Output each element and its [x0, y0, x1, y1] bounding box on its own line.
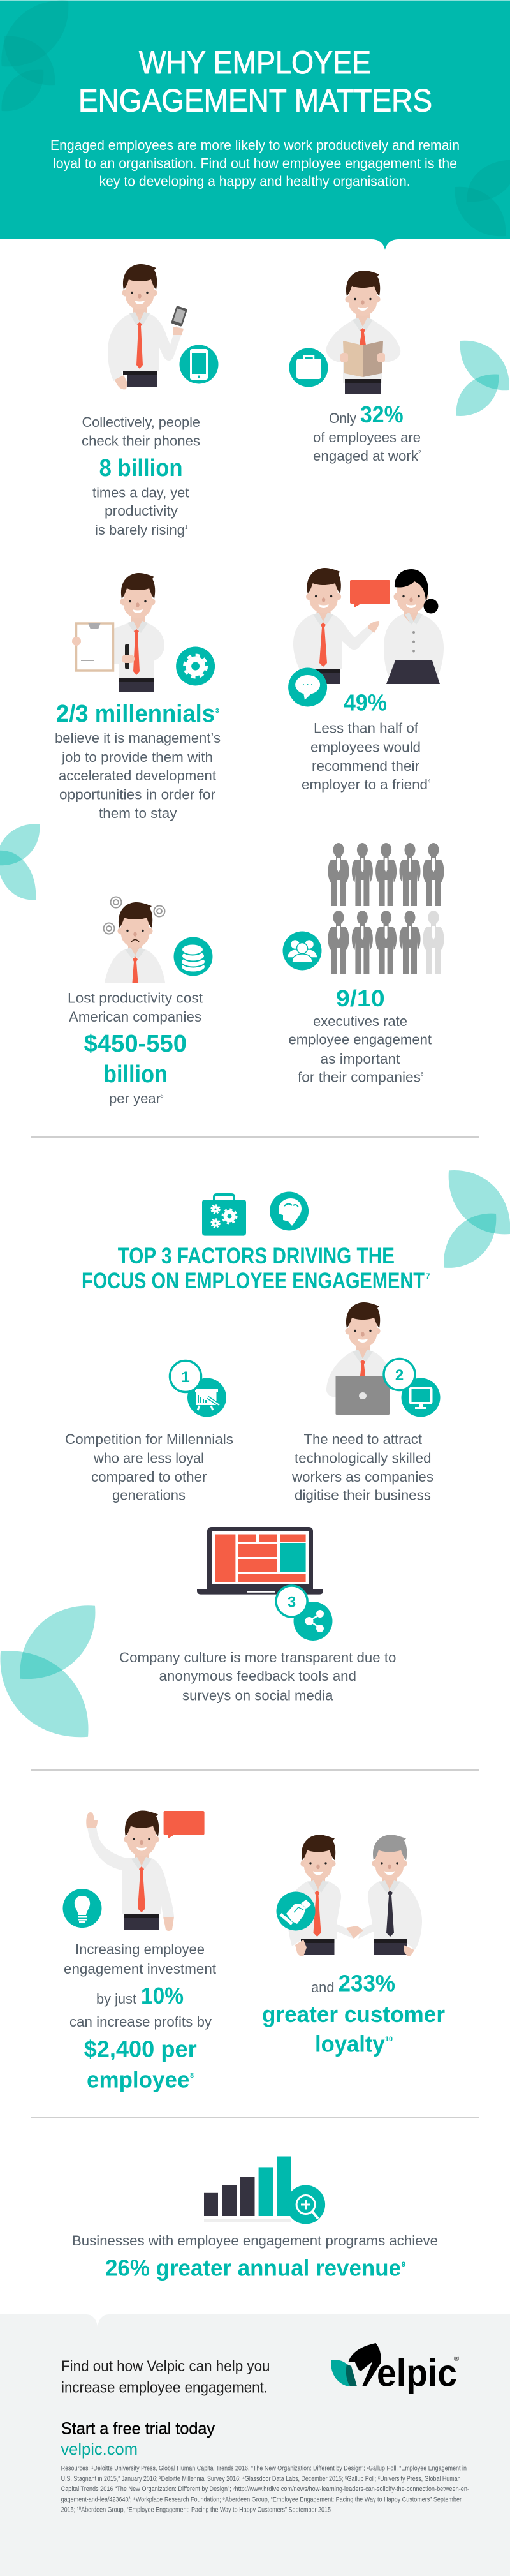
text: annual revenue: 26% greater annual revenue: [105, 2255, 401, 2281]
text: 49%: [302, 689, 431, 793]
text: 9/10: as important: [320, 1051, 400, 1067]
text: lost productivity: $450-550: [84, 1031, 187, 1057]
text: annual revenue: 9: [402, 2261, 405, 2268]
text: phones: 1: [185, 525, 188, 530]
decorative leaf right 2: [444, 1170, 510, 1268]
text: investment: can increase profits by: [69, 2014, 212, 2030]
call to action: increase employee engagement.: [61, 2379, 268, 2397]
heading: FOCUS ON EMPLOYEE ENGAGEMENT: [82, 1269, 425, 1293]
text: investment: employee: [87, 2066, 189, 2092]
text: lost productivity: American companies: [69, 1009, 201, 1025]
text: phones: Collectively, people: [82, 414, 200, 430]
text: millennials: [55, 701, 221, 821]
footer panel: [0, 2314, 510, 2576]
number 3: [276, 1586, 307, 1617]
text: 32%: engaged at work: [313, 448, 419, 464]
text: investment: 8: [190, 2072, 194, 2080]
text: millennials: accelerated development: [59, 768, 217, 784]
text: lost productivity: billion: [103, 1061, 168, 1088]
icon: group: [283, 932, 321, 970]
text: lost productivity: 5: [161, 1093, 164, 1099]
logo: Velpic: V: [347, 2354, 379, 2394]
text: factor 2: digitise their business: [295, 1487, 431, 1503]
text: phones: 8 billion: [99, 455, 183, 482]
text: annual revenue: Businesses with employee engagement programs achieve: [72, 2233, 438, 2249]
stat: customer loyalty: [262, 1835, 445, 2057]
illustration: man with phone: [108, 264, 187, 389]
stat: 32% engaged: [289, 271, 421, 464]
stat: phones: [82, 264, 218, 538]
text: factor 1: compared to other: [91, 1469, 207, 1485]
illustration: man talking to woman: [293, 568, 444, 684]
text: 32%: 2: [418, 450, 421, 456]
logo: Velpic: elpic: [377, 2351, 457, 2394]
text: factor 2: The need to attract: [303, 1431, 423, 1447]
logo: Velpic: ®: [454, 2355, 459, 2363]
icon: monitor: [402, 1378, 440, 1417]
call to action: velpic.com: [61, 2439, 138, 2459]
factor 2: [291, 1302, 440, 1503]
text: 32%: 32%: [360, 401, 404, 428]
text: loyalty: loyalty: [315, 2031, 385, 2057]
decorative leaf left: [0, 824, 40, 900]
text: factor 1: who are less loyal: [93, 1450, 204, 1466]
text: investment: 10%: [141, 1983, 184, 2009]
text: millennials: believe it is management’s: [55, 730, 221, 746]
text: loyalty: and: [311, 1979, 334, 1995]
text: loyalty: 10: [385, 2036, 393, 2043]
icon: presentation board: [187, 1378, 226, 1417]
text: 32%: of employees are: [313, 429, 421, 445]
stat: investment: [62, 1811, 217, 2092]
decorative leaf right 1: [456, 341, 509, 416]
text: 49%: Less than half of: [314, 720, 419, 736]
illustration: man with clipboard: [72, 573, 164, 692]
intro text: loyal to an organisation. Find out how employee engagement is the: [53, 156, 457, 171]
text: factor 2: workers as companies: [291, 1469, 433, 1485]
text: lost productivity: [68, 990, 203, 1106]
illustration: handshake: [288, 1835, 422, 1956]
text: annual revenue: [72, 2233, 438, 2281]
text: investment: by just: [96, 1991, 137, 2007]
illustration: stressed man: [103, 897, 165, 983]
text: 49%: 49%: [344, 689, 387, 716]
text: factor 1: [65, 1431, 233, 1503]
text: 9/10: executives rate: [313, 1013, 407, 1029]
intro text: [50, 137, 460, 189]
text: millennials: them to stay: [99, 805, 177, 821]
call to action: Find out how Velpic can help you: [61, 2358, 270, 2375]
header leaves right: [455, 160, 510, 236]
text: millennials: 2/3 millennials: [56, 701, 215, 727]
text: investment: $2,400 per: [84, 2036, 197, 2062]
text: factor 3: surveys on social media: [182, 1687, 333, 1704]
section: top 3 factors: [65, 1192, 440, 1704]
text: 32%: [313, 401, 421, 464]
illustration: man at laptop: [326, 1302, 390, 1415]
text: phones: [82, 414, 200, 538]
text: 49%: employees would: [310, 739, 421, 755]
icon: head with brain: [270, 1192, 309, 1230]
icon: handshake: [277, 1891, 315, 1931]
factor 1: [65, 1360, 233, 1503]
text: millennials: 3: [215, 708, 219, 715]
text: phones: check their phones: [82, 433, 200, 449]
bar chart icon: [204, 2157, 325, 2224]
text: factor 3: [119, 1649, 396, 1704]
text: millennials: job to provide them with: [61, 749, 213, 765]
illustration: man reading: [326, 271, 400, 394]
text: investment: Increasing employee: [75, 1941, 205, 1958]
stat: lost productivity: [68, 897, 213, 1106]
text: phones: times a day, yet: [92, 485, 189, 500]
icon: coins: [173, 937, 213, 976]
text: 49%: employer to a friend: [302, 777, 428, 793]
icon: briefcase with gears: [202, 1195, 246, 1236]
icon: gear: [176, 647, 215, 685]
icon: smartphone: [180, 345, 218, 384]
text: 9/10: 9/10: [336, 985, 385, 1011]
text: factor 3: Company culture is more transparent due to: [119, 1649, 396, 1665]
text: loyalty: 233%: [339, 1970, 395, 1996]
text: investment: engagement investment: [64, 1961, 217, 1977]
text: factor 2: [291, 1431, 433, 1503]
text: 9/10: employee engagement: [288, 1031, 432, 1048]
text: factor 2: technologically skilled: [295, 1450, 431, 1466]
stat: 9/10 executives: [283, 843, 444, 1085]
text: 32%: Only: [329, 410, 357, 426]
heading: TOP 3 FACTORS DRIVING THE: [118, 1244, 395, 1269]
header banner: [0, 0, 510, 250]
text: phones: is barely rising: [95, 522, 185, 538]
number 1: 1: [181, 1369, 190, 1386]
resources: 2015; ¹⁰Aberdeen Group, “Employee Engagement: Pacing the Way to Happy Customers” September 2015: [61, 2506, 331, 2514]
text: 9/10: for their companies: [298, 1069, 421, 1085]
illustration: laptop dashboard: [197, 1527, 323, 1595]
text: lost productivity: Lost productivity cost: [68, 990, 203, 1006]
factor 3: [119, 1527, 396, 1704]
call to action: [61, 2358, 270, 2459]
resources: [61, 2465, 469, 2514]
stat: annual revenue: [72, 2157, 438, 2281]
text: factor 3: anonymous feedback tools and: [159, 1668, 356, 1684]
text: millennials: opportunities in order for: [59, 786, 216, 803]
intro text: key to developing a happy and healthy organisation.: [99, 174, 411, 189]
stat: 49%: [288, 568, 444, 793]
number 2: [384, 1359, 415, 1390]
text: 49%: 4: [428, 778, 431, 784]
number 1: [170, 1360, 201, 1392]
icon: light bulb: [62, 1889, 102, 1928]
pictogram: ten people: [328, 843, 444, 974]
text: phones: productivity: [105, 503, 178, 519]
text: loyalty: [262, 1970, 445, 2057]
heading: 7: [426, 1272, 430, 1281]
text: 9/10: 6: [421, 1071, 424, 1077]
title: [78, 45, 432, 119]
number 2: 2: [395, 1367, 404, 1384]
text: 9/10: [288, 985, 432, 1085]
title: ENGAGEMENT MATTERS: [78, 83, 432, 119]
stat: millennials: [55, 573, 221, 821]
text: factor 1: generations: [112, 1487, 186, 1503]
icon: speech bubble: [288, 667, 327, 707]
title: WHY EMPLOYEE: [139, 45, 371, 80]
header leaves left: [1, 1, 68, 111]
text: investment: [64, 1941, 217, 2092]
call to action: Start a free trial today: [61, 2419, 215, 2438]
heading: [82, 1244, 430, 1293]
text: loyalty: greater customer: [262, 2001, 445, 2027]
number 3: 3: [288, 1594, 296, 1611]
text: lost productivity: per year: [109, 1091, 161, 1106]
decorative leaf bottom left: [0, 1605, 95, 1737]
illustration: man waving: [86, 1811, 205, 1931]
intro text: Engaged employees are more likely to work productively and remain: [50, 137, 460, 153]
text: 49%: recommend their: [312, 758, 419, 774]
icon: share: [293, 1602, 333, 1641]
icon: briefcase: [289, 348, 328, 387]
logo: Velpic: [331, 2343, 459, 2394]
text: factor 1: Competition for Millennials: [65, 1431, 233, 1447]
